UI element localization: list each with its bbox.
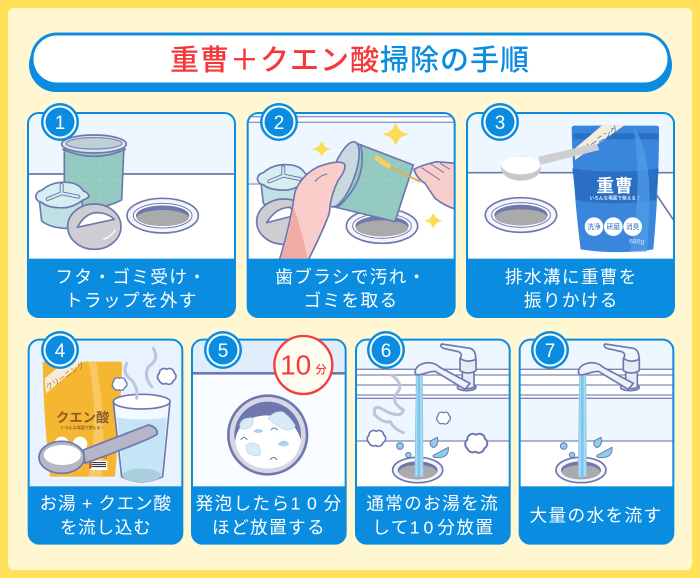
step 3 caption: 排水溝に重曹を <box>505 267 638 287</box>
icon: water stream <box>415 375 423 477</box>
bag text: クリーニング <box>574 124 620 158</box>
icon: basket held <box>330 141 414 222</box>
icon: drain <box>556 457 606 483</box>
badge: step 1 <box>41 103 79 141</box>
icon: baking soda bag: 研磨 <box>607 222 620 231</box>
icon: faucet <box>415 344 476 391</box>
badge: step 1: 1 <box>55 113 65 134</box>
callout: 10 minutes: 10 <box>280 350 311 381</box>
badge: step 3 <box>481 103 519 141</box>
icon: drain ring <box>127 198 198 233</box>
icon: baking soda bag: いろんな場面で使える！ <box>589 194 641 201</box>
icon: baking soda bag <box>572 124 659 252</box>
icon: baking soda bag: 680g <box>629 238 644 245</box>
badge: step 2 <box>260 103 298 141</box>
icon: steam and puffs <box>112 348 176 398</box>
badge: step 4 <box>41 331 79 369</box>
badge: step 4: 4 <box>55 341 66 362</box>
icon: lid <box>256 198 293 246</box>
icon: right hand <box>414 162 457 209</box>
step 2 caption: ゴミを取る <box>304 291 398 311</box>
icon: puffs <box>367 412 487 453</box>
step 5 caption: 発泡したら10分 <box>196 493 342 513</box>
icon: faucet <box>578 344 639 391</box>
icon: sparkles <box>315 124 440 227</box>
icon: left hand <box>279 162 345 260</box>
icon: baking soda bag: 重曹 <box>596 176 634 196</box>
step 1 caption: トラップを外す <box>65 291 198 311</box>
icon: foaming drain <box>228 396 307 474</box>
step 1 caption: フタ・ゴミ受け・ <box>55 267 207 287</box>
icon: baking soda bag: 洗浄 <box>587 222 601 231</box>
icon: steam <box>374 375 403 433</box>
badge: step 6 <box>367 331 405 369</box>
step 2 caption: 歯ブラシで汚れ・ <box>275 266 427 287</box>
callout: 10 minutes <box>274 336 332 394</box>
panel: step 4 <box>28 339 183 546</box>
icon: measuring spoon <box>501 143 599 181</box>
title: 重曹＋クエン酸掃除の手順 <box>170 44 530 77</box>
icon: citric acid bag: 300g <box>96 454 107 459</box>
panel: step 5 <box>191 336 346 546</box>
bag text: クリーニング <box>44 360 87 392</box>
step 3 caption: 振りかける <box>524 291 619 311</box>
icon: glass of hot water <box>113 394 170 482</box>
icon: citric acid bag: いろんな場面で使える！ <box>61 424 105 430</box>
icon: filter basket <box>62 135 126 207</box>
icon: drain ring <box>346 209 418 243</box>
badge: step 5 <box>204 331 242 369</box>
badge: step 7 <box>531 331 569 369</box>
badge: step 5: 5 <box>218 341 228 362</box>
icon: trap cap <box>36 182 89 228</box>
icon: spoon <box>39 425 157 473</box>
step 4 caption: お湯 + クエン酸 <box>40 493 172 513</box>
icon: water drops <box>397 437 448 458</box>
icon: citric acid bag: クエン酸 <box>56 409 110 425</box>
title banner <box>29 34 672 92</box>
step 6 caption: 通常のお湯を流 <box>366 493 499 513</box>
icon: baking soda bag: 消臭 <box>626 222 640 231</box>
panel: step 7 <box>518 338 674 545</box>
badge: step 6: 6 <box>381 341 391 362</box>
step 4 caption: を流し込む <box>60 517 151 537</box>
step 5 caption: ほど放置する <box>212 517 326 537</box>
step 7 caption: 大量の水を流す <box>530 505 662 525</box>
badge: step 7: 7 <box>545 341 555 362</box>
panel: step 1 <box>27 112 236 319</box>
callout: 10 minutes: 分 <box>315 363 327 376</box>
icon: toothbrush <box>377 158 420 182</box>
panel: step 2 <box>247 112 457 319</box>
badge: step 3: 3 <box>495 113 505 134</box>
icon: water stream <box>578 375 586 477</box>
badge: step 2: 2 <box>274 113 284 134</box>
icon: citric acid bag <box>42 360 122 477</box>
icon: drain <box>393 457 443 483</box>
icon: drain ring <box>485 198 557 232</box>
icon: water drops <box>560 437 612 458</box>
panel: step 3 <box>466 112 675 319</box>
icon: trap cap <box>256 164 307 205</box>
icon: lid <box>68 204 121 249</box>
step 6 caption: して10分放置 <box>372 517 494 537</box>
panel: step 6 <box>355 338 511 545</box>
